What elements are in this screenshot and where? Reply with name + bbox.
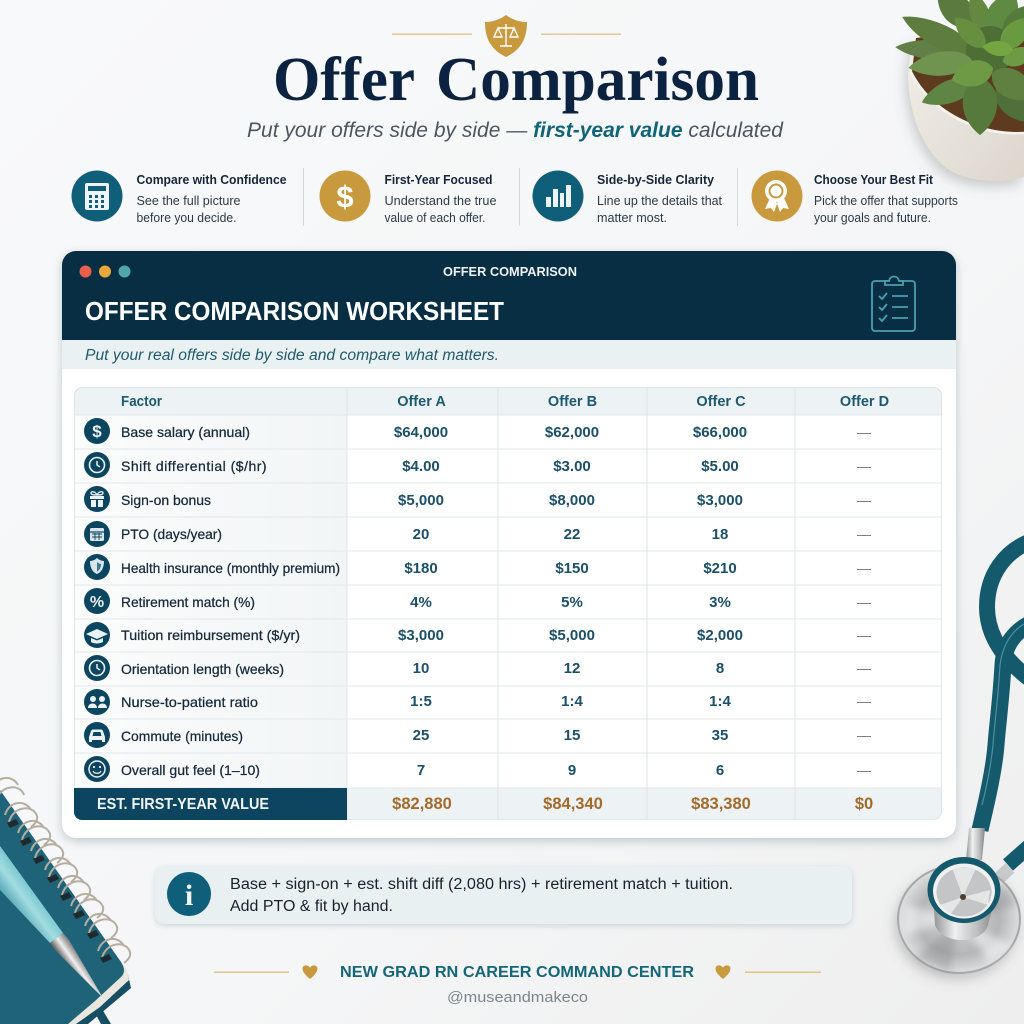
row labels: Retirement match (%) (121, 594, 255, 610)
feature: first-year focused: value of each offer. (384, 210, 486, 225)
table header row: Offer B (548, 394, 597, 410)
panel: worksheet card (62, 251, 956, 838)
row labels: Base salary (annual) (121, 424, 250, 440)
table (74, 387, 942, 820)
column: Offer D values (857, 424, 871, 778)
column: Offer A values: 10 (413, 660, 429, 677)
icon: info: i (185, 879, 193, 912)
column: Offer C values: 3% (709, 594, 731, 611)
feature: compare with confidence: See the full picture (136, 193, 240, 208)
icon: graduation cap (84, 622, 110, 648)
window label: OFFER COMPARISON (443, 265, 577, 279)
row labels: Shift differential ($/hr) (121, 458, 267, 474)
column: Offer C values: 6 (716, 762, 724, 779)
column: Offer D values: — (857, 492, 871, 508)
row labels: PTO (days/year) (121, 526, 222, 542)
callout: calculation note: Base + sign-on + est. shift diff (2,080 hrs) + retirement match + tuition. (230, 876, 733, 893)
table header row: Offer D (840, 394, 889, 410)
column: Offer D values: — (857, 762, 871, 778)
column: Offer B values: $5,000 (549, 627, 595, 644)
title: Offer (273, 46, 415, 114)
column: Offer A values: $4.00 (402, 458, 440, 475)
icon: calculator (72, 170, 122, 222)
icon: percent (84, 588, 110, 614)
column: Offer D values: — (857, 727, 871, 743)
row labels: Overall gut feel (1–10) (121, 762, 260, 778)
column: Offer C values: 18 (712, 526, 728, 543)
icon: spiral notebook with pen (0, 778, 131, 1024)
icon: calendar (84, 521, 110, 547)
subheading band (62, 340, 956, 369)
column: Offer B values: $3.00 (553, 458, 591, 475)
title (273, 46, 759, 114)
column: Offer A values: $64,000 (394, 424, 448, 441)
total row: EST. FIRST-YEAR VALUE (97, 796, 269, 813)
table header row (121, 394, 889, 410)
icon: clock (84, 452, 110, 478)
callout: calculation note (155, 866, 852, 924)
feature: choose your best fit: Choose Your Best Fit (814, 172, 934, 187)
row icons (84, 418, 110, 782)
feature: side-by-side clarity: Line up the details that (597, 193, 722, 208)
icon: heart right (716, 965, 730, 979)
column: Offer A values: 25 (413, 727, 429, 744)
column: Offer D values: — (857, 660, 871, 676)
footer handle: @museandmakeco (447, 989, 588, 1006)
feature: compare with confidence (72, 170, 286, 225)
icon: shield (84, 554, 110, 580)
column: Offer C values: 8 (716, 660, 724, 677)
table header row: Offer C (696, 394, 746, 410)
column: Offer A values (394, 424, 448, 779)
column: Offer C values: $5.00 (701, 458, 739, 475)
column: Offer B values: 15 (564, 727, 580, 744)
column: Offer A values: $3,000 (398, 627, 444, 644)
icon: people (84, 689, 110, 715)
title: Comparison (436, 46, 759, 114)
icon: clock (84, 655, 110, 681)
table header row: Offer A (397, 394, 446, 410)
column: Offer B values: 5% (561, 594, 583, 611)
total row: $0 (855, 795, 873, 813)
column: Offer A values: $5,000 (398, 492, 444, 509)
feature: compare with confidence: before you decide. (136, 210, 236, 225)
row labels: Nurse-to-patient ratio (121, 694, 258, 710)
footer title: NEW GRAD RN CAREER COMMAND CENTER (340, 964, 694, 981)
icon: smile (84, 756, 110, 782)
column: Offer B values: 1:4 (561, 693, 583, 710)
footer (214, 964, 821, 1006)
icon: bar chart (532, 170, 584, 222)
feature: choose your best fit: your goals and future. (814, 210, 931, 225)
callout: calculation note: Add PTO & fit by hand. (230, 898, 393, 915)
icon: gift (84, 486, 110, 512)
column: Offer B values (545, 424, 599, 779)
column: Offer C values: 1:4 (709, 693, 731, 710)
column: Offer C values: 35 (712, 727, 728, 744)
feature: side-by-side clarity: Side-by-Side Clarity (597, 172, 715, 187)
column: Offer A values: 20 (413, 526, 429, 543)
subheading band: Put your real offers side by side and compare what matters. (85, 347, 499, 364)
feature: first-year focused (320, 170, 496, 225)
column: Offer B values: $62,000 (545, 424, 599, 441)
icon: clipboard checklist (872, 276, 915, 331)
column: Offer B values: $8,000 (549, 492, 595, 509)
column: Offer D values: — (857, 693, 871, 709)
icon: car (84, 722, 110, 748)
total row: $83,380 (691, 795, 751, 813)
panel header bar (62, 251, 956, 340)
column: Offer C values: $66,000 (693, 424, 747, 441)
icon: heart left (302, 965, 318, 979)
column: Offer C values: $210 (703, 560, 737, 577)
row labels: Sign-on bonus (121, 492, 211, 508)
row labels (121, 424, 340, 778)
column: Offer B values: 12 (564, 660, 580, 677)
column: Offer C values: $2,000 (697, 627, 743, 644)
total row: $84,340 (543, 795, 603, 813)
icon: shield with scales (485, 15, 527, 57)
icon: dollar (84, 418, 110, 444)
subtitle: Put your offers side by side — first-year value calculated (247, 119, 784, 142)
column: Offer D values: — (857, 526, 871, 542)
feature: side-by-side clarity: matter most. (597, 210, 667, 225)
column: Offer C values (693, 424, 747, 779)
feature: side-by-side clarity (532, 170, 722, 225)
row labels: Health insurance (monthly premium) (121, 560, 340, 576)
column: Offer B values: 22 (564, 526, 580, 543)
feature: first-year focused: Understand the true (384, 193, 496, 208)
column: Offer B values: 9 (568, 762, 576, 779)
column: Offer D values: — (857, 560, 871, 576)
column: Offer C values: $3,000 (697, 492, 743, 509)
row labels: Commute (minutes) (121, 728, 243, 744)
icon: award ribbon (752, 170, 802, 222)
window dots (80, 266, 130, 278)
feature: choose your best fit: Pick the offer that supports (814, 193, 958, 208)
icon: dollar: $ (92, 422, 102, 441)
icon: info (167, 872, 211, 916)
icon: percent: % (90, 594, 104, 611)
column: Offer B values: $150 (555, 560, 589, 577)
row labels: Orientation length (weeks) (121, 661, 284, 677)
feature: compare with confidence: Compare with Confidence (136, 172, 286, 187)
column: Offer D values: — (857, 627, 871, 643)
icon: dollar coin: $ (336, 179, 354, 214)
feature: choose your best fit (752, 170, 958, 225)
column: Offer A values: 1:5 (410, 693, 432, 710)
total row: $82,880 (392, 795, 452, 813)
icon: potted succulent plant (894, 0, 1024, 181)
total row (74, 788, 873, 820)
column: Offer A values: $180 (404, 560, 438, 577)
icon: dollar coin (320, 170, 370, 222)
column: Offer D values: — (857, 424, 871, 440)
column: Offer D values: — (857, 594, 871, 610)
worksheet heading: OFFER COMPARISON WORKSHEET (85, 296, 504, 326)
column: Offer A values: 4% (410, 594, 432, 611)
row labels: Tuition reimbursement ($/yr) (121, 627, 300, 643)
table header row: Factor (121, 394, 162, 410)
feature: first-year focused: First-Year Focused (384, 172, 493, 187)
column: Offer D values: — (857, 458, 871, 474)
column: Offer A values: 7 (417, 762, 425, 779)
icon: stethoscope (898, 540, 1024, 973)
